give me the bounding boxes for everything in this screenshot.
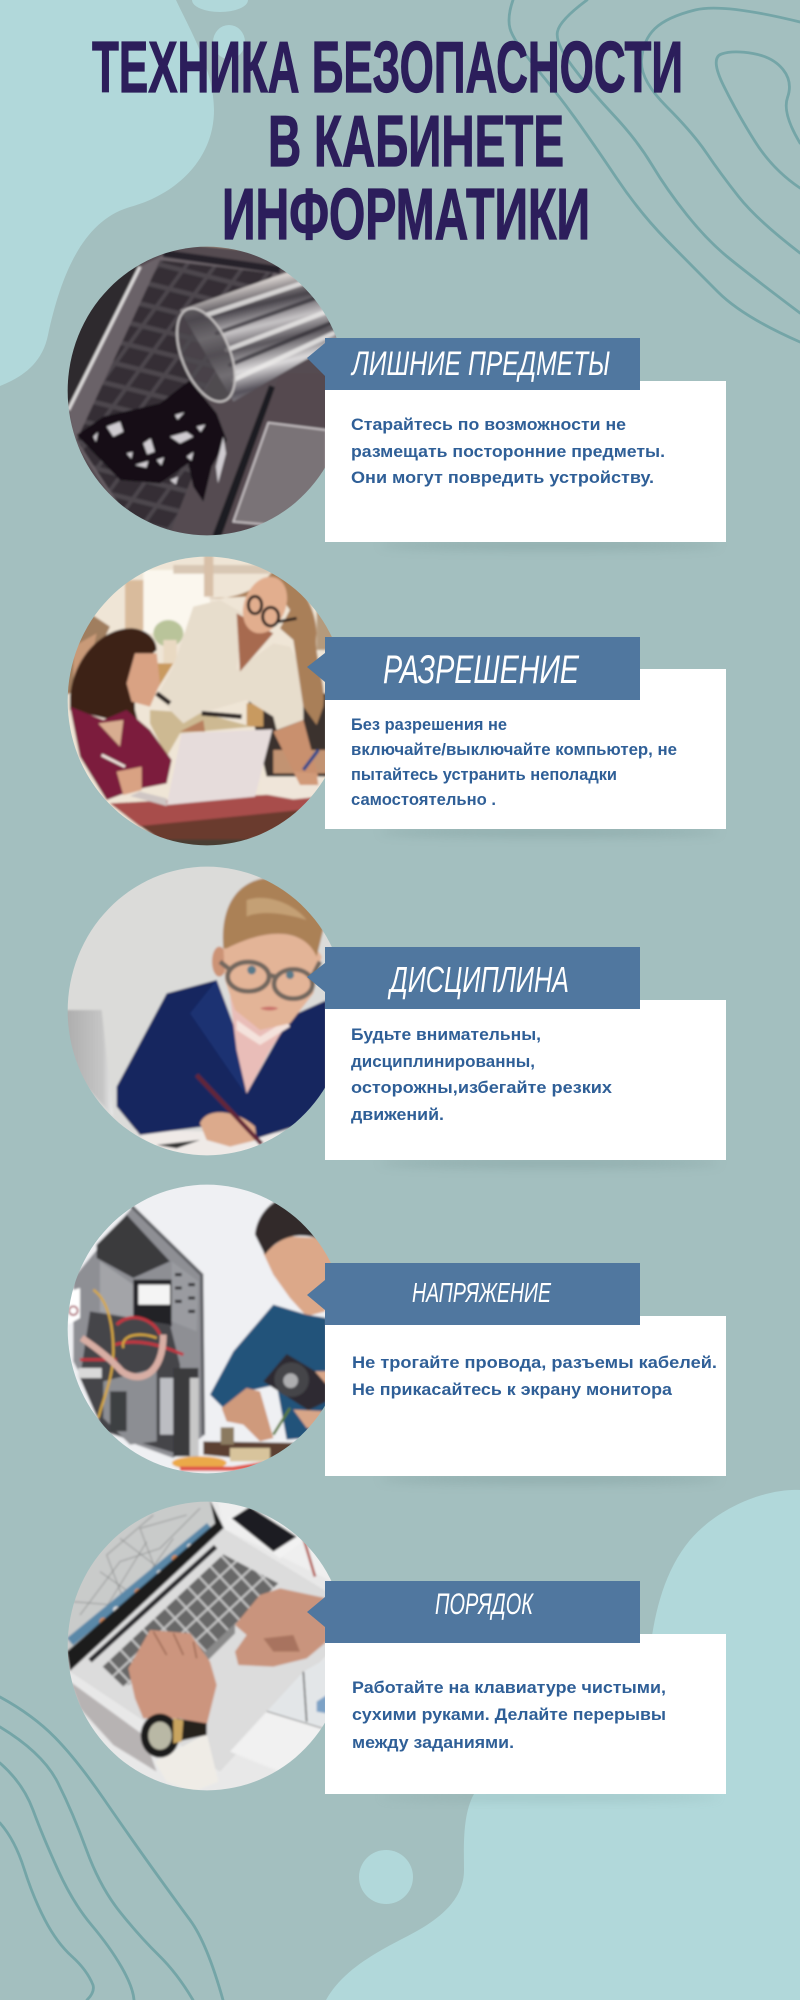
card 1 heading: ЛИШНИЕ ПРЕДМЕТЫ (351, 345, 610, 383)
card 2 white panel (325, 669, 726, 829)
blob: top left (0, 0, 214, 386)
card 2 text: самостоятельно . (351, 790, 496, 809)
card 4 text (352, 1353, 717, 1399)
card 5 shadow (380, 1793, 720, 1801)
card 4 heading: НАПРЯЖЕНИЕ (412, 1277, 551, 1308)
card 2 heading: РАЗРЕШЕНИЕ (383, 648, 580, 692)
card 2 text: включайте/выключайте компьютер, не (351, 740, 677, 759)
blob: bottom right (326, 1490, 800, 2000)
card 5 text: сухими руками. Делайте перерывы (352, 1705, 666, 1724)
card 3 heading: ДИСЦИПЛИНА (387, 959, 569, 1000)
card 1: extra objects (307, 338, 726, 550)
card 4 shadow (380, 1474, 720, 1484)
card 4: voltage (307, 1263, 726, 1484)
card 1 text (351, 415, 665, 487)
title: ИНФОРМАТИКИ (222, 175, 590, 255)
photo: boy in glasses writing (68, 866, 332, 1156)
card 4 white panel (325, 1316, 726, 1476)
card 1 text: Они могут повредить устройству. (351, 468, 654, 487)
card 3 text: дисциплинированны, (351, 1052, 535, 1071)
card 4 banner (307, 1263, 640, 1325)
card 2 text: Без разрешения не (351, 715, 507, 734)
card 3 text: Будьте внимательны, (351, 1025, 541, 1044)
title: В КАБИНЕТЕ (268, 102, 564, 182)
card 1 white panel (325, 381, 726, 542)
card 1 text: Старайтесь по возможности не (351, 415, 626, 434)
title (92, 28, 683, 255)
card 2 banner (307, 637, 640, 700)
blob: top small bubble (192, 0, 248, 12)
card 3 banner (307, 947, 640, 1009)
card 5 text: между заданиями. (352, 1733, 514, 1752)
card 5: order (307, 1581, 726, 1801)
card 5 heading: ПОРЯДОК (435, 1588, 535, 1621)
card 5 text: Работайте на клавиатуре чистыми, (352, 1678, 666, 1697)
photo: water spilled on a keyboard (68, 246, 336, 536)
card 4 text: Не прикасайтесь к экрану монитора (352, 1380, 673, 1399)
card 5 white panel (325, 1634, 726, 1794)
card 3: discipline (307, 947, 726, 1168)
photo: man repairing a computer (68, 1184, 331, 1474)
contour lines: top right (509, 0, 800, 342)
card 2 shadow (380, 827, 720, 837)
card 3 text: движений. (351, 1105, 444, 1124)
card 3 shadow (380, 1158, 720, 1168)
card 2 text (351, 715, 677, 809)
blob: bottom circle (359, 1850, 413, 1904)
card 3 text: осторожны,избегайте резких (351, 1078, 613, 1097)
card 3 white panel (325, 1000, 726, 1160)
blob: top capsule (213, 25, 245, 59)
contour lines: bottom left (0, 1697, 223, 2000)
card 1 banner (307, 338, 640, 390)
photo: teacher and student at a laptop (68, 556, 332, 846)
card 3 text (351, 1025, 613, 1124)
card 4 text: Не трогайте провода, разъемы кабелей. (352, 1353, 717, 1372)
card 1 shadow (380, 540, 720, 550)
card 5 banner (307, 1581, 640, 1643)
card 1 text: размещать посторонние предметы. (351, 442, 665, 461)
card 2 text: пытайтесь устранить неполадки (351, 765, 617, 784)
photo: hands typing on a laptop (68, 1502, 332, 1790)
card 5 text (352, 1678, 666, 1752)
card 2: permission (307, 637, 726, 837)
